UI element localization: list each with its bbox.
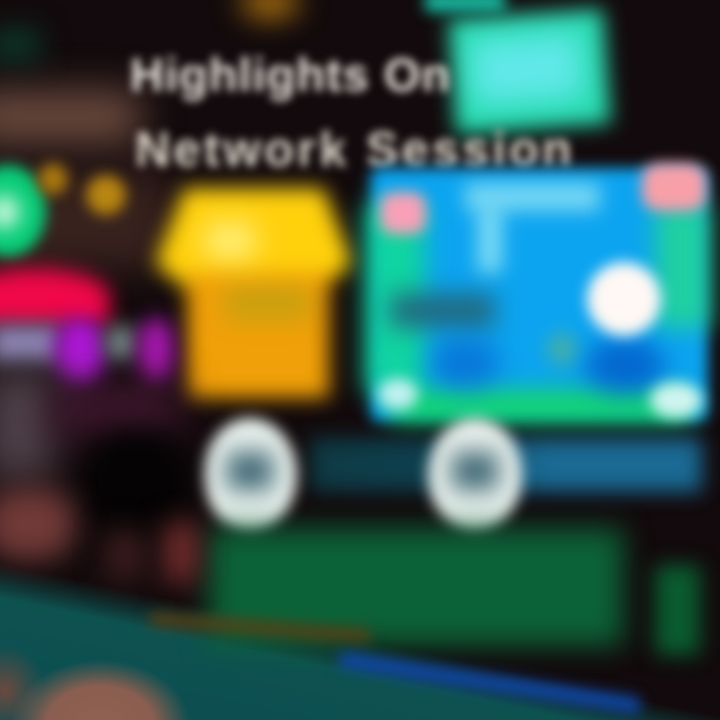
band: blue strip	[310, 438, 702, 492]
arc: red	[0, 268, 110, 324]
house label	[225, 286, 310, 320]
house body	[187, 273, 329, 398]
blue streak shape	[340, 645, 640, 720]
corner: pink top left of screen	[380, 192, 426, 234]
heading: line one: Highlights On	[130, 48, 451, 101]
screen left green strip	[365, 203, 425, 393]
floor: amber streak	[144, 606, 376, 648]
icon: white ball	[587, 262, 661, 336]
background: brown left band	[0, 90, 140, 145]
background: left brown haze	[0, 170, 170, 270]
left badge center	[227, 452, 273, 490]
screen bottom green strip	[390, 390, 690, 422]
background: top orange glow	[240, 0, 300, 20]
blob: left grey white row	[0, 325, 60, 363]
corner: white bottom right of screen	[650, 382, 702, 418]
badge: right white circle	[428, 418, 522, 532]
blob: purple right	[138, 318, 174, 383]
panel: green right block	[655, 565, 700, 655]
screen green dot	[548, 333, 576, 365]
screen dark label	[390, 293, 495, 328]
house roof	[155, 188, 353, 293]
green circle center	[0, 195, 20, 229]
blob: pale center	[105, 325, 137, 361]
right badge center	[452, 452, 498, 490]
house highlight	[205, 223, 255, 258]
teal screen highlight	[470, 32, 584, 105]
blob: plum glow	[50, 385, 180, 435]
dot: amber left	[38, 163, 68, 195]
blob: pink brown left	[0, 488, 75, 560]
panel: teal top screen	[448, 9, 611, 134]
screen top pale band	[465, 183, 600, 211]
blob: mid brown	[105, 530, 145, 580]
corner: pink top right of screen	[642, 163, 706, 211]
icon: green circle	[0, 165, 46, 257]
screen blue blob	[585, 338, 665, 393]
heading: line two: Network Session	[135, 123, 575, 177]
floor: blue streak	[332, 643, 650, 720]
background: top left green glow	[0, 30, 40, 60]
screen pale column	[478, 208, 502, 273]
panel: yellow house icon	[142, 171, 363, 415]
blob: dark silhouette	[85, 430, 190, 540]
blob: pink brown right	[165, 522, 197, 582]
screen lower blob	[430, 338, 500, 388]
corner: white bottom left of screen	[378, 378, 418, 410]
amber streak shape	[150, 600, 370, 650]
blob: purple left	[55, 318, 105, 386]
panel: green lower block	[208, 528, 623, 646]
blob: left grey column	[0, 370, 55, 480]
dot: amber right	[86, 175, 126, 215]
badge: left white circle	[203, 418, 297, 532]
teal top edge	[425, 0, 505, 12]
screen right green strip	[655, 203, 710, 328]
panel: blue green game screen	[370, 168, 708, 422]
